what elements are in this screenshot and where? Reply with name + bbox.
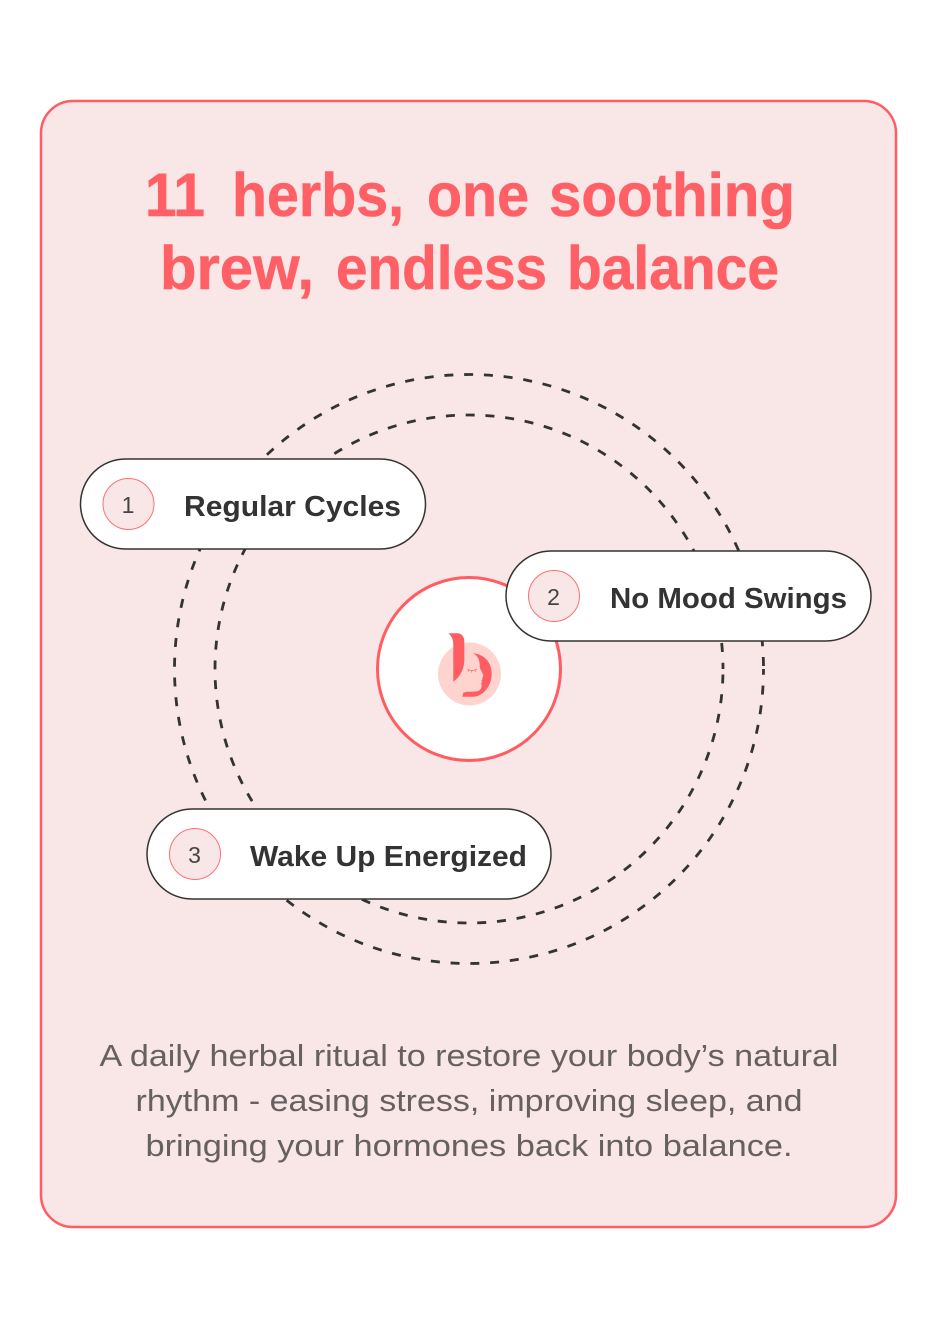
center logo circle (378, 578, 560, 760)
description text (100, 1038, 838, 1163)
number badge 1 (103, 478, 154, 530)
number badge 1: 1 (122, 492, 134, 518)
number badge 3 (170, 828, 220, 880)
description text: A daily herbal ritual to restore your body’s natural (100, 1038, 838, 1073)
icon: face logo (438, 633, 501, 706)
description text: bringing your hormones back into balance. (146, 1128, 792, 1163)
number badge 3: 3 (188, 842, 201, 868)
title: brew, (160, 234, 314, 302)
number badge 2: 2 (547, 584, 560, 610)
pill: No Mood Swings (506, 551, 871, 641)
pill: Wake Up Energized (147, 809, 551, 899)
title: one (427, 161, 529, 229)
icon: eyelashes (468, 669, 477, 672)
title (145, 161, 795, 302)
title: balance (567, 234, 779, 302)
number badge 2 (528, 570, 580, 622)
label: No Mood Swings: No Mood Swings (610, 583, 847, 615)
panel: card background (41, 101, 896, 1227)
title: soothing (549, 161, 795, 229)
title: herbs, (232, 161, 404, 229)
title: endless (336, 234, 547, 302)
title: 11 (145, 161, 205, 229)
pill: Regular Cycles (80, 459, 426, 549)
label: Regular Cycles: Regular Cycles (184, 491, 401, 523)
dashed orbit rings (174, 374, 764, 964)
label: Wake Up Energized: Wake Up Energized (250, 841, 527, 873)
description text: rhythm - easing stress, improving sleep, and (136, 1083, 802, 1118)
